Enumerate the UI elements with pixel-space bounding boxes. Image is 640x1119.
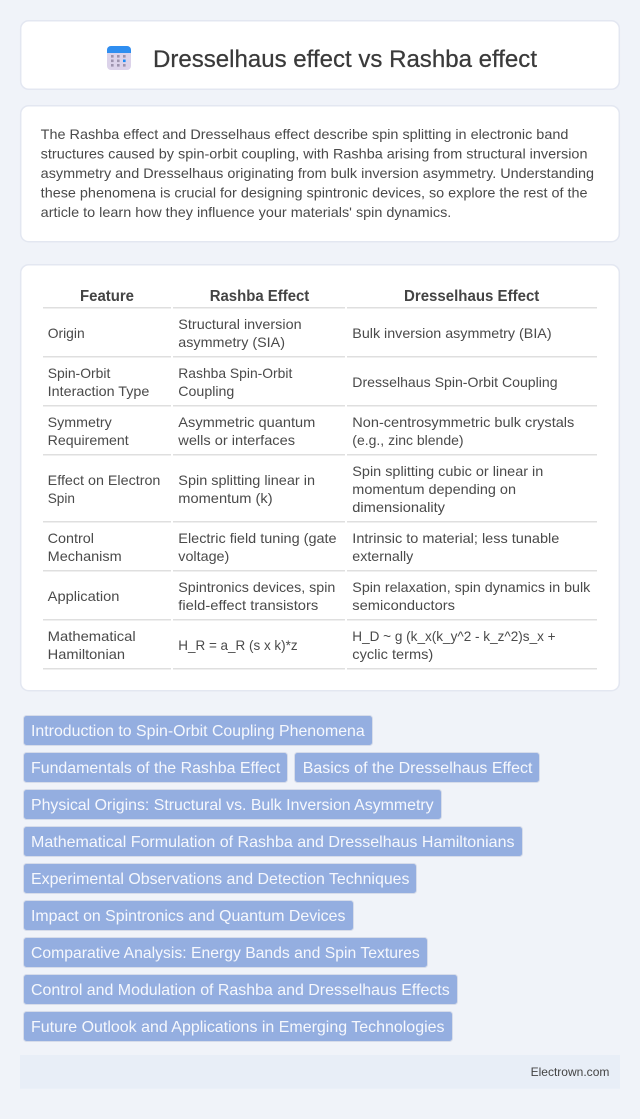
- table row: symmetry requirement: Requirement: [48, 432, 129, 448]
- table header row: Dresselhaus Effect: [404, 288, 540, 305]
- table row: symmetry requirement: Symmetry: [48, 414, 112, 430]
- table row: control mechanism: Intrinsic to material; less tunable: [352, 530, 560, 546]
- panel: title header: [21, 21, 619, 89]
- tag: comparative analysis: [24, 938, 428, 968]
- tag: experimental observations: Experimental Observations and Detection Techniques: [31, 871, 410, 888]
- tag: future outlook: [24, 1012, 452, 1042]
- table row: symmetry requirement: Non-centrosymmetric bulk crystals: [352, 414, 574, 430]
- text block: introduction paragraph: [41, 126, 594, 220]
- text block: introduction paragraph: structures caused by spin-orbit coupling, with Rashba arising from structural inversion: [41, 146, 587, 162]
- table row: effect on electron spin: momentum depending on: [352, 481, 516, 497]
- topic tags: [24, 716, 540, 1042]
- table row: effect on electron spin: Spin splitting cubic or linear in: [352, 463, 543, 479]
- table row: application: [48, 579, 591, 613]
- tag: rashba fundamentals: [24, 752, 288, 782]
- panel: introduction: [21, 106, 619, 242]
- table row: control mechanism: voltage): [178, 548, 229, 564]
- tag: future outlook: Future Outlook and Applications in Emerging Technologies: [31, 1019, 444, 1036]
- table row: symmetry requirement: Asymmetric quantum: [178, 414, 315, 430]
- table row: spin-orbit interaction type: Rashba Spin-Orbit: [178, 365, 292, 381]
- table row: mathematical hamiltonian: Mathematical: [48, 628, 136, 644]
- tag: rashba fundamentals: Fundamentals of the Rashba Effect: [31, 760, 281, 777]
- table row: spin-orbit interaction type: Interaction Type: [48, 383, 150, 399]
- footer: Electrown.com: [531, 1065, 609, 1079]
- table row: origin: Origin: [48, 325, 85, 341]
- table row: mathematical hamiltonian: Hamiltonian: [48, 646, 125, 662]
- tag: control and modulation: Control and Modulation of Rashba and Dresselhaus Effects: [31, 982, 450, 999]
- text block: introduction paragraph: article to learn how they influence your materials' spin dynamics.: [41, 204, 451, 220]
- text block: introduction paragraph: asymmetry and Dresselhaus originating from bulk inversion asymmetry. Understanding: [41, 165, 594, 181]
- tag: introduction: [24, 716, 372, 746]
- text block: introduction paragraph: these phenomena is crucial for designing spintronic devices, so explore the rest of the: [41, 185, 588, 201]
- table row: effect on electron spin: Spin: [48, 490, 75, 506]
- table row: spin-orbit interaction type: [48, 365, 558, 399]
- tag: control and modulation: [24, 974, 458, 1004]
- table header row: [80, 288, 540, 305]
- tag: physical origins: [24, 790, 442, 820]
- table row: spin-orbit interaction type: Spin-Orbit: [48, 365, 110, 381]
- tag: comparative analysis: Comparative Analysis: Energy Bands and Spin Textures: [31, 945, 420, 962]
- table row: effect on electron spin: Spin splitting linear in: [178, 472, 315, 488]
- table row: application: Application: [48, 588, 119, 604]
- tag: dresselhaus basics: [294, 752, 540, 782]
- table row: mathematical hamiltonian: cyclic terms): [352, 646, 433, 662]
- table row: mathematical hamiltonian: H_D ~ g (k_x(k_y^2 - k_z^2)s_x +: [352, 628, 556, 644]
- tag: experimental observations: [24, 864, 416, 894]
- table row: origin: Bulk inversion asymmetry (BIA): [352, 325, 552, 341]
- tag: physical origins: Physical Origins: Structural vs. Bulk Inversion Asymmetry: [31, 797, 434, 814]
- tag: mathematical formulation: Mathematical Formulation of Rashba and Dresselhaus Hamiltonians: [31, 834, 514, 851]
- table row: origin: [48, 316, 552, 350]
- table row: control mechanism: externally: [352, 548, 413, 564]
- table row: application: semiconductors: [352, 597, 455, 613]
- table row: application: field-effect transistors: [178, 597, 318, 613]
- table row: mathematical hamiltonian: [48, 628, 556, 662]
- icon: calendar: [107, 46, 131, 70]
- table row: origin: asymmetry (SIA): [178, 334, 285, 350]
- table row: control mechanism: Control: [48, 530, 94, 546]
- table row: effect on electron spin: Effect on Electron: [48, 472, 160, 488]
- table row: effect on electron spin: dimensionality: [352, 499, 445, 515]
- title: Dresselhaus effect vs Rashba effect: [153, 46, 537, 73]
- footer: [20, 1055, 620, 1089]
- tag: impact on spintronics: [24, 900, 354, 930]
- table header row: Feature: [80, 288, 134, 305]
- table row: application: Spin relaxation, spin dynamics in bulk: [352, 579, 591, 595]
- table row: symmetry requirement: wells or interfaces: [177, 432, 295, 448]
- tag: dresselhaus basics: Basics of the Dresselhaus Effect: [303, 760, 533, 777]
- table row: spin-orbit interaction type: Coupling: [178, 383, 234, 399]
- table row: effect on electron spin: [48, 463, 543, 515]
- table row: mathematical hamiltonian: H_R = a_R (s x k)*z: [178, 637, 298, 653]
- table row: application: Spintronics devices, spin: [178, 579, 335, 595]
- table header row: Rashba Effect: [210, 288, 310, 305]
- panel: comparison table: [21, 265, 619, 691]
- table row: spin-orbit interaction type: Dresselhaus Spin-Orbit Coupling: [352, 374, 558, 390]
- table row: symmetry requirement: (e.g., zinc blende): [352, 432, 464, 448]
- table row: symmetry requirement: [48, 414, 574, 448]
- text block: introduction paragraph: The Rashba effect and Dresselhaus effect describe spin splitting in electronic band: [41, 126, 568, 142]
- tag: mathematical formulation: [24, 826, 522, 856]
- table row: control mechanism: Mechanism: [48, 548, 122, 564]
- table row: control mechanism: [48, 530, 560, 564]
- tag: impact on spintronics: Impact on Spintronics and Quantum Devices: [31, 908, 345, 925]
- table row: control mechanism: Electric field tuning (gate: [178, 530, 337, 546]
- tag: introduction: Introduction to Spin-Orbit Coupling Phenomena: [31, 723, 365, 740]
- table row: effect on electron spin: momentum (k): [178, 490, 273, 506]
- table row: origin: Structural inversion: [178, 316, 302, 332]
